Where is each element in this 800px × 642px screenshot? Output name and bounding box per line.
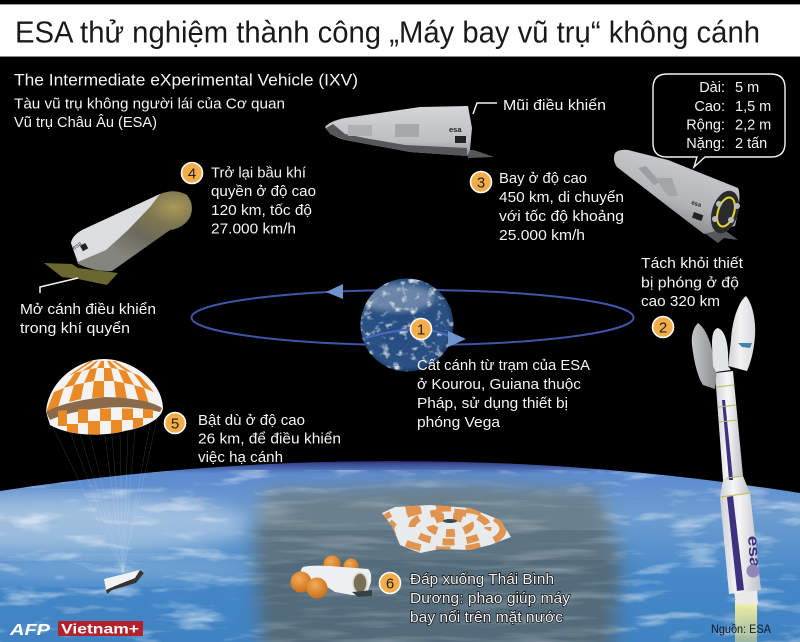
subtitle block [14, 72, 358, 131]
step 4 [182, 162, 316, 238]
text 2 [641, 256, 743, 310]
text 2: Tách khỏi thiết [641, 256, 743, 272]
rocket upper stage [715, 371, 743, 480]
text 1 [417, 358, 590, 431]
flap [466, 150, 494, 158]
earth horizon background [0, 461, 800, 642]
header band with title [0, 4, 800, 57]
dimensions callout: Nặng: [686, 136, 725, 152]
text 4: quyền ở độ cao [211, 184, 316, 200]
flaps [703, 228, 738, 243]
hull [71, 191, 192, 271]
badge 1 [410, 318, 432, 340]
canopy orange panels [46, 361, 154, 412]
rocket flame [735, 600, 757, 642]
small capsule under parachute [104, 570, 144, 594]
badge 3 [470, 172, 492, 192]
text 3: 25.000 km/h [499, 228, 585, 244]
orbit front arc across globe [362, 329, 456, 339]
text 5: 26 km, để điều khiển [198, 432, 341, 448]
orbit back arc [192, 290, 634, 345]
step 2 [641, 256, 743, 338]
text 1: ở Kourou, Guiana thuộc [417, 377, 581, 393]
badge 6 [380, 572, 400, 594]
esa mark: esa [690, 200, 702, 209]
text 6: Đáp xuống Thái Bình [410, 572, 554, 588]
text 2: cao 320 km [641, 294, 720, 310]
subtitle block: Vũ trụ Châu Âu (ESA) [14, 114, 157, 131]
vehicle: re-entry with control flaps [20, 191, 192, 337]
hull [614, 150, 739, 234]
text 4 [211, 166, 316, 238]
text 3: Bay ở độ cao [499, 171, 587, 187]
step 6 [380, 572, 571, 626]
badge 5: 5 [171, 416, 179, 432]
text 1: Cất cánh từ trạm của ESA [417, 358, 590, 374]
subtitle block: The Intermediate eXperimental Vehicle (IXV) [14, 72, 358, 90]
capsule hull [301, 566, 371, 596]
dimensions callout: 2,2 m [735, 118, 771, 134]
text 4: 27.000 km/h [211, 222, 296, 238]
badge 3: 3 [477, 174, 485, 192]
dimensions callout: 5 m [735, 80, 759, 96]
step 3 [470, 171, 624, 244]
text 5: việc hạ cánh [198, 450, 283, 466]
rocket: launch vehicle [692, 296, 763, 642]
arrow: orbit direction right [448, 331, 466, 347]
rear ring [706, 187, 744, 237]
rear buoys [324, 556, 340, 572]
vehicle: separated IXV with rear view [614, 150, 744, 243]
badge 1: 1 [417, 322, 425, 338]
control nose leader line [473, 103, 497, 114]
flap label [20, 302, 156, 337]
fairing left half [692, 323, 717, 389]
Vietnam+ logo: Vietnam+ [61, 620, 139, 636]
suspension lines [52, 414, 158, 572]
text 3 [499, 171, 624, 244]
text 5 [198, 413, 341, 466]
rocket lower stage [720, 493, 761, 594]
dimensions callout: Cao: [694, 99, 725, 115]
subtitle block: Tàu vũ trụ không người lái của Cơ quan [14, 96, 285, 112]
badge 6: 6 [386, 576, 394, 592]
esa logo on rocket: esa [744, 535, 763, 569]
front buoys [290, 572, 312, 592]
badge 5 [164, 412, 186, 434]
canopy inner opening [46, 397, 162, 420]
badge 2: 2 [659, 320, 667, 336]
parachute descent [46, 359, 163, 594]
text 3: với tốc độ khoảng [499, 209, 624, 225]
control nose label: Mũi điều khiển [503, 98, 606, 114]
canopy dome [46, 359, 163, 435]
canopy lower band [58, 408, 153, 435]
source credit: Nguồn: ESA [711, 624, 771, 636]
text 6: bay nổi trên mặt nước [410, 610, 563, 626]
dimensions callout: Rộng: [686, 118, 725, 134]
dimensions callout: 1,5 m [735, 99, 771, 115]
yellow flaps [44, 263, 118, 285]
arrow: orbit direction left [326, 284, 343, 299]
esa mark: esa [449, 125, 462, 134]
text 1: phóng Vega [417, 415, 501, 431]
fairing middle [712, 328, 731, 372]
text 4: Trở lại bầu khí [211, 166, 306, 182]
white upper surface [71, 194, 160, 262]
flap label: trong khí quyển [20, 321, 130, 337]
vehicle floating with buoys [290, 556, 372, 598]
text 6 [410, 572, 571, 626]
AFP logo: AFP [9, 622, 51, 639]
text 2: bị phóng ở độ [641, 276, 739, 292]
flap leader line [40, 278, 78, 293]
text 3: 450 km, di chuyển [499, 190, 624, 206]
text 6: Dương: phao giúp máy [410, 591, 571, 607]
step 5 [164, 412, 341, 466]
step 1 [410, 318, 590, 431]
earth globe [359, 278, 454, 372]
flap label: Mở cánh điều khiển [20, 302, 156, 318]
esa logo on rocket [744, 535, 763, 578]
rocket nozzle [734, 590, 758, 604]
text 1: Pháp, sử dụng thiết bị [417, 396, 568, 412]
text 4: 120 km, tốc độ [211, 203, 312, 219]
vehicle: re-entry with control flaps: esa [72, 241, 84, 252]
badge 4: 4 [188, 166, 196, 182]
text 5: Bật dù ở độ cao [198, 413, 305, 429]
vehicle: IXV side view in orbit [325, 98, 606, 158]
title: ESA thử nghiệm thành công „Máy bay vũ trụ“ không cánh [15, 16, 760, 50]
rocket mid stage [720, 476, 750, 497]
dimensions callout: Dài: [699, 80, 725, 96]
parachute floating on the sea [382, 505, 511, 553]
ocean surface patch [244, 472, 632, 642]
hull [325, 106, 472, 156]
dimensions callout: 2 tấn [735, 136, 767, 152]
dimensions callout [653, 74, 785, 167]
fairing right half [728, 296, 755, 371]
